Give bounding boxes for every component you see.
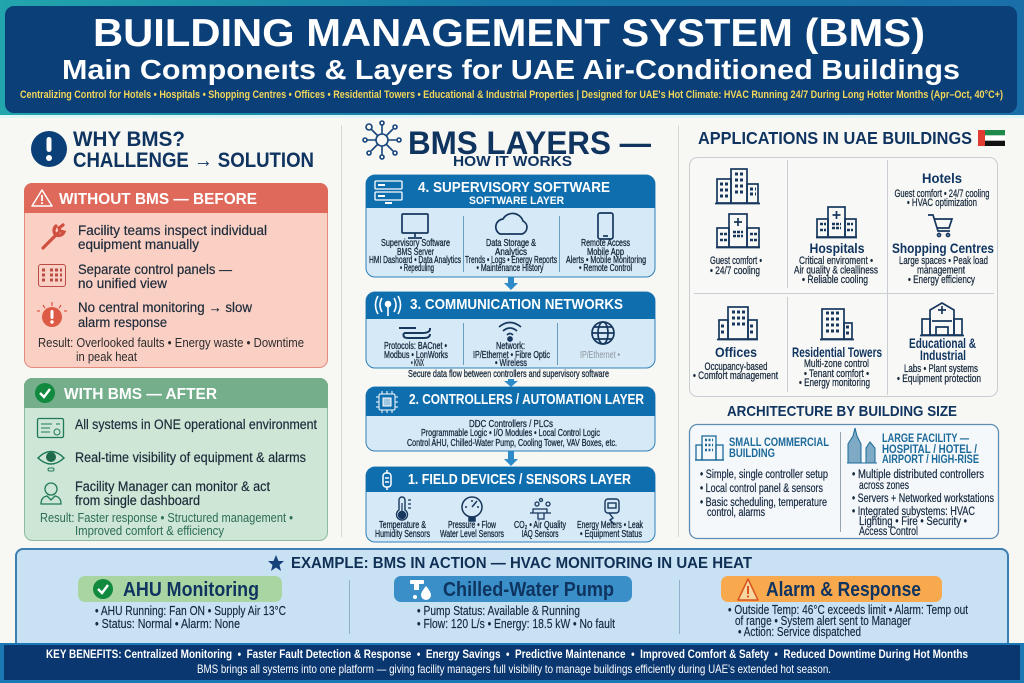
text: educational and industrial: Industrial [920, 347, 966, 363]
text: CO2 [514, 520, 566, 540]
text: manual inspection: Facility teams inspect individual [78, 223, 267, 238]
panel: layer 3 communication networks [366, 292, 655, 369]
icon: cloud [496, 213, 527, 234]
text: hotels: • HVAC optimization [907, 197, 977, 209]
heading: layer 1: 1. FIELD DEVICES / SENSORS LAYER [408, 471, 631, 488]
text: offices: Occupancy-based [704, 361, 768, 373]
list: large facility: Lighting • Fire • Security • [859, 516, 967, 528]
icon: alarm [37, 302, 67, 327]
text: shopping centres: Shopping Centres [892, 240, 994, 256]
text: data storage: • Maintenance History [476, 263, 544, 274]
icon: star [268, 555, 284, 571]
text: pressure [440, 520, 504, 540]
text: temperature: Temperature & [379, 520, 426, 531]
panel: BMS layers [363, 121, 655, 542]
list: small commercial: control, alarms [707, 507, 765, 519]
text: no central monitoring: alarm response [78, 315, 167, 330]
heading: large facility [882, 433, 979, 466]
text: hospitals: Critical enviroment • [799, 255, 873, 267]
text: supervisory software: HMI Dashoard • Data Analytics [369, 255, 461, 266]
text: result [40, 511, 293, 538]
text: energy meters: • Equipment Status [580, 529, 642, 540]
text: energy meters: Energy Meters • Leak [577, 520, 644, 531]
list: small commercial: • Basic scheduling, temperature [700, 497, 827, 509]
panel: architecture by size [690, 424, 998, 538]
heading: with BMS: WITH BMS — AFTER [64, 386, 217, 403]
label: alarm and response: Alarm & Response [766, 579, 921, 601]
text: controllers detail: Control AHU, Chilled-Water Pump, Cooling Tower, VAV Boxes, etc. [407, 437, 617, 449]
panel: layer 2 controllers [366, 387, 655, 451]
text: facility manager: from single dashboard [75, 493, 200, 508]
icon: check circle [35, 383, 55, 403]
text: hospitals: Hospitals [810, 240, 865, 256]
icon: CO2 sensor [530, 498, 551, 519]
icon: office [717, 307, 758, 340]
panel: why BMS [24, 128, 328, 540]
heading: small commercial: SMALL COMMERCIAL [729, 437, 829, 449]
text: hotels: Hotels [922, 170, 962, 186]
text: remote access: Alerts • Mobile Monitoring [566, 255, 646, 266]
icon: sensor [383, 470, 391, 490]
text: supervisory software: BMS Server [397, 247, 434, 258]
heading: large facility: AIRPORT / HIGH-RISE [882, 454, 979, 466]
list: large facility: • Integrated subystems: HVAC [852, 506, 975, 518]
text: energy meters [577, 520, 644, 540]
text: result: Result: Overlooked faults • Energy waste • Downtime [38, 336, 304, 350]
text: alarm details: • Action: Service dispatched [738, 625, 861, 639]
text: educational and industrial [897, 335, 981, 385]
card: chilled-water pump [394, 576, 632, 631]
text: AHU status [95, 604, 286, 631]
footer: key benefits [0, 643, 1024, 683]
text: residential towers: Multi-zone control [804, 358, 869, 370]
icon: hotel building [715, 169, 760, 204]
heading: large facility: HOSPITAL / HOTEL / [882, 444, 978, 456]
text: residential towers [792, 344, 882, 389]
heading: layer 2: 2. CONTROLLERS / AUTOMATION LAYER [409, 391, 644, 408]
icon: shopping cart [928, 215, 952, 236]
icon: educational building [920, 303, 964, 336]
title: BUILDING MANAGEMENT SYSTEM (BMS) [93, 12, 925, 55]
text: facility manager: Facility Manager can monitor & act [75, 479, 270, 494]
application grid [690, 158, 998, 396]
text: protocols [384, 341, 448, 369]
text: no central monitoring [78, 300, 252, 330]
text: hotel description: • 24/7 cooling [710, 265, 760, 277]
heading: applications: APPLICATIONS IN UAE BUILDINGS [698, 128, 972, 148]
label: AHU monitoring: AHU Monitoring [123, 579, 259, 601]
text: CO2: CO₂ • Air Quality [514, 520, 566, 531]
heading: why BMS [73, 128, 314, 172]
text: educational and industrial: Educational & [909, 335, 976, 351]
text: separate panels: no unified view [78, 276, 167, 291]
icon: gauge [462, 497, 482, 521]
text: pump status: • Flow: 120 L/s • Energy: 18.5 kW • No fault [417, 617, 615, 631]
icon: antenna [376, 296, 400, 316]
icon: server [375, 181, 402, 203]
text: manual inspection [78, 223, 267, 252]
list: large facility: across zones [859, 480, 909, 492]
text: shopping centres: Large spaces • Peak load [899, 255, 988, 267]
icon: hospital [716, 214, 760, 248]
list: small commercial: • Simple, single controller setup [700, 469, 828, 481]
icon: energy meter [605, 499, 619, 524]
arrow: layer 3 to 2 [504, 379, 518, 387]
panel: layer 4 supervisory software [366, 175, 655, 277]
icon: cable [399, 328, 430, 338]
text: alarm details: • Outside Temp: 46°C exceeds limit • Alarm: Temp out [728, 603, 968, 617]
text: controllers detail [407, 418, 617, 449]
icon: small building [695, 436, 724, 460]
text: network: Network: [496, 341, 525, 352]
text: offices [693, 344, 778, 382]
caption: secure data flow: Secure data flow between controllers and supervisory software [408, 368, 609, 380]
text: alarm details: of range • System alert sent to Manager [735, 614, 911, 628]
text: shopping centres [892, 240, 994, 286]
heading: BMS layers: BMS LAYERS — [408, 125, 651, 161]
panel: layer 1 field devices [366, 467, 655, 542]
panel: with BMS [24, 378, 328, 540]
heading: small commercial [729, 437, 829, 460]
text: protocols: Modbus • LonWorks [384, 350, 448, 361]
text: result: Improved comfort & efficiency [75, 524, 225, 538]
text: hospitals: • Reliable cooling [802, 274, 868, 286]
text: IP ethernet: IP/Ethernet • [580, 350, 620, 361]
icon: exclamation circle [31, 131, 67, 167]
icon: skyline [847, 428, 877, 463]
panel: applications [690, 128, 1005, 538]
text: residential towers: • Energy monitoring [799, 377, 870, 389]
icon: warning triangle [32, 190, 52, 206]
heading: how it works: HOW IT WORKS [453, 153, 572, 170]
icon: control panel [38, 264, 66, 286]
heading: why BMS: CHALLENGE → SOLUTION [73, 149, 314, 172]
icon: phone [598, 213, 613, 239]
text: data storage: Trends • Logs • Energy Reports [465, 255, 557, 266]
text: manual inspection: equipment manually [78, 237, 199, 252]
text: hotel description [710, 255, 762, 277]
icon: eye [38, 452, 64, 471]
text: data storage: Analytics [495, 247, 527, 258]
text: residential towers: • Tenant comfort • [804, 368, 869, 380]
label: chilled-water pump: Chilled-Water Pump [443, 579, 614, 601]
arrow: layer 2 to 1 [504, 451, 518, 466]
icon: warning [738, 579, 758, 600]
list: large facility [852, 469, 994, 538]
panel: without BMS [24, 183, 328, 368]
text: shopping centres: • Energy efficiency [908, 274, 975, 286]
header banner [0, 0, 1024, 115]
icon: residential tower [820, 309, 854, 340]
text: result: in peak heat [76, 350, 137, 364]
icon: thermometer [396, 497, 411, 520]
text: remote access: Remote Access [581, 238, 630, 249]
list: large facility: Access Control [859, 526, 918, 538]
text: result: Result: Faster response • Structured management • [40, 511, 293, 525]
text: hospitals [794, 240, 878, 286]
text: all systems: All systems in ONE operational environment [75, 417, 317, 432]
subheading: software layer: SOFTWARE LAYER [469, 195, 564, 207]
text: hotel description: Guest comfort • [710, 255, 762, 267]
text: pump status [417, 604, 615, 631]
list: large facility: • Multiple distributed controllers [852, 469, 984, 481]
card: AHU monitoring [78, 576, 286, 631]
text: controllers detail: Programmable Logic • I/O Modules • Local Control Logic [421, 427, 600, 439]
subtitle: Main Componeıts & Layers for UAE Air-Conditioned Buildings [62, 54, 960, 85]
icon: UAE flag [978, 130, 1005, 146]
icon: network gear [363, 121, 401, 159]
text: AHU status: • Status: Normal • Alarm: None [95, 617, 240, 631]
text: network: IP/Ethernet • Fibre Optic [473, 350, 550, 361]
text: real-time visibility: Real-time visibility of equipment & alarms [75, 450, 306, 465]
list: small commercial: • Local control panel & sensors [700, 483, 823, 495]
text: facility manager [75, 479, 270, 508]
text: offices: Offices [715, 344, 757, 360]
heading: architecture: ARCHITECTURE BY BUILDING SIZE [727, 403, 957, 420]
text: offices: • Comfort management [693, 370, 778, 382]
text: remote access: • Remote Control [579, 263, 632, 274]
text: separate panels [78, 262, 232, 291]
text: residential towers: Residential Towers [792, 344, 882, 360]
heading: example: EXAMPLE: BMS IN ACTION — HVAC MONITORING IN UAE HEAT [291, 555, 752, 572]
text: result [38, 336, 304, 364]
icon: wrench [43, 225, 64, 248]
text: remote access: Mobile App [587, 247, 624, 258]
icon: globe [592, 322, 614, 344]
text: data storage [465, 238, 557, 274]
icon: monitor [402, 214, 428, 238]
icon: check [93, 579, 113, 599]
text: protocols: • KNX [411, 358, 424, 369]
text: temperature [375, 520, 430, 540]
text: network: • Wireless [495, 358, 527, 369]
text: controllers detail: DDC Controllers / PLCs [469, 418, 553, 430]
icon: tap and drop [410, 580, 431, 600]
card: alarm and response [721, 576, 968, 639]
text: educational and industrial: • Equipment protection [897, 373, 981, 385]
text: closing statement: BMS brings all systems into one platform — giving facility managers full visibility to manage buildings efficiently during UAE's extended hot season. [197, 662, 831, 676]
text: separate panels: Separate control panels — [78, 262, 232, 277]
heading: layer 4: 4. SUPERVISORY SOFTWARE [418, 179, 610, 196]
text: supervisory software [369, 238, 461, 274]
list: small commercial [700, 469, 828, 519]
icon: chip [376, 391, 398, 413]
text: hospitals: Air quality & clealliness [794, 264, 878, 276]
heading: without BMS: WITHOUT BMS — BEFORE [59, 191, 257, 208]
icon: facility manager [41, 483, 61, 504]
text: CO2: IAQ Sensors [522, 529, 558, 540]
icon: wifi [499, 322, 521, 341]
text: network [473, 341, 550, 369]
arrow: layer 4 to 3 [504, 277, 518, 290]
text: hotels [894, 170, 990, 209]
heading: layer 3: 3. COMMUNICATION NETWORKS [410, 296, 623, 313]
panel: example BMS in action [16, 549, 1008, 649]
text: protocols: Protocols: BACnet • [384, 341, 447, 352]
text: remote access [566, 238, 646, 274]
text: alarm details [728, 603, 968, 639]
heading: large facility: LARGE FACILITY — [882, 433, 969, 445]
heading: why BMS: WHY BMS? [73, 128, 185, 151]
text: pump status: • Pump Status: Available & Running [417, 604, 580, 618]
text: supervisory software: Supervisory Software [381, 238, 450, 249]
icon: hospital 2 [816, 207, 857, 238]
heading: small commercial: BUILDING [729, 448, 775, 460]
text: educational and industrial: Labs • Plant systems [904, 363, 978, 375]
text: AHU status: • AHU Running: Fan ON • Supply Air 13°C [95, 604, 286, 618]
text: shopping centres: management [917, 264, 965, 276]
text: supervisory software: • Repeduling [400, 263, 434, 274]
icon: dashboard [38, 418, 64, 438]
text: no central monitoring: No central monitoring → slow [78, 300, 252, 315]
text: temperature: Humidity Sensors [375, 529, 430, 540]
text: pressure: Pressure • Flow [448, 520, 497, 531]
text: pressure: Water Level Sensors [440, 529, 504, 540]
text: data storage: Data Storage & [486, 238, 536, 249]
